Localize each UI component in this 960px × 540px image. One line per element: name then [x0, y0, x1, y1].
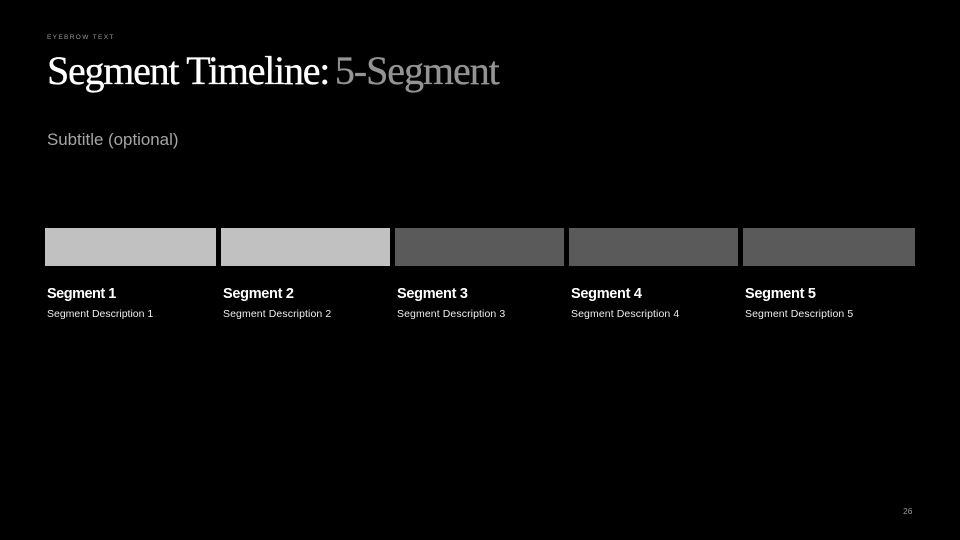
- segment 5 name: Segment 5: [745, 286, 816, 302]
- segment 2 name: Segment 2: [223, 286, 294, 302]
- segment 5 bar: [743, 228, 915, 266]
- segment 3 bar: [395, 228, 564, 266]
- segment 3 name: Segment 3: [397, 286, 468, 302]
- segment 4 bar: [569, 228, 738, 266]
- title: Segment Timeline: 5-Segment: [47, 48, 499, 93]
- segment 1 name: Segment 1: [47, 286, 116, 302]
- segment 3 description: Segment Description 3: [397, 308, 505, 320]
- segment 2 bar: [221, 228, 390, 266]
- segment 2 description: Segment Description 2: [223, 308, 331, 320]
- segment 1 bar: [45, 228, 216, 266]
- eyebrow text: EYEBROW TEXT: [47, 34, 115, 41]
- segment 5 description: Segment Description 5: [745, 308, 853, 320]
- segment 1 description: Segment Description 1: [47, 308, 153, 320]
- subtitle: Subtitle (optional): [47, 130, 178, 149]
- page number: 26: [903, 506, 912, 516]
- segment 4 description: Segment Description 4: [571, 308, 679, 320]
- segment 4 name: Segment 4: [571, 286, 642, 302]
